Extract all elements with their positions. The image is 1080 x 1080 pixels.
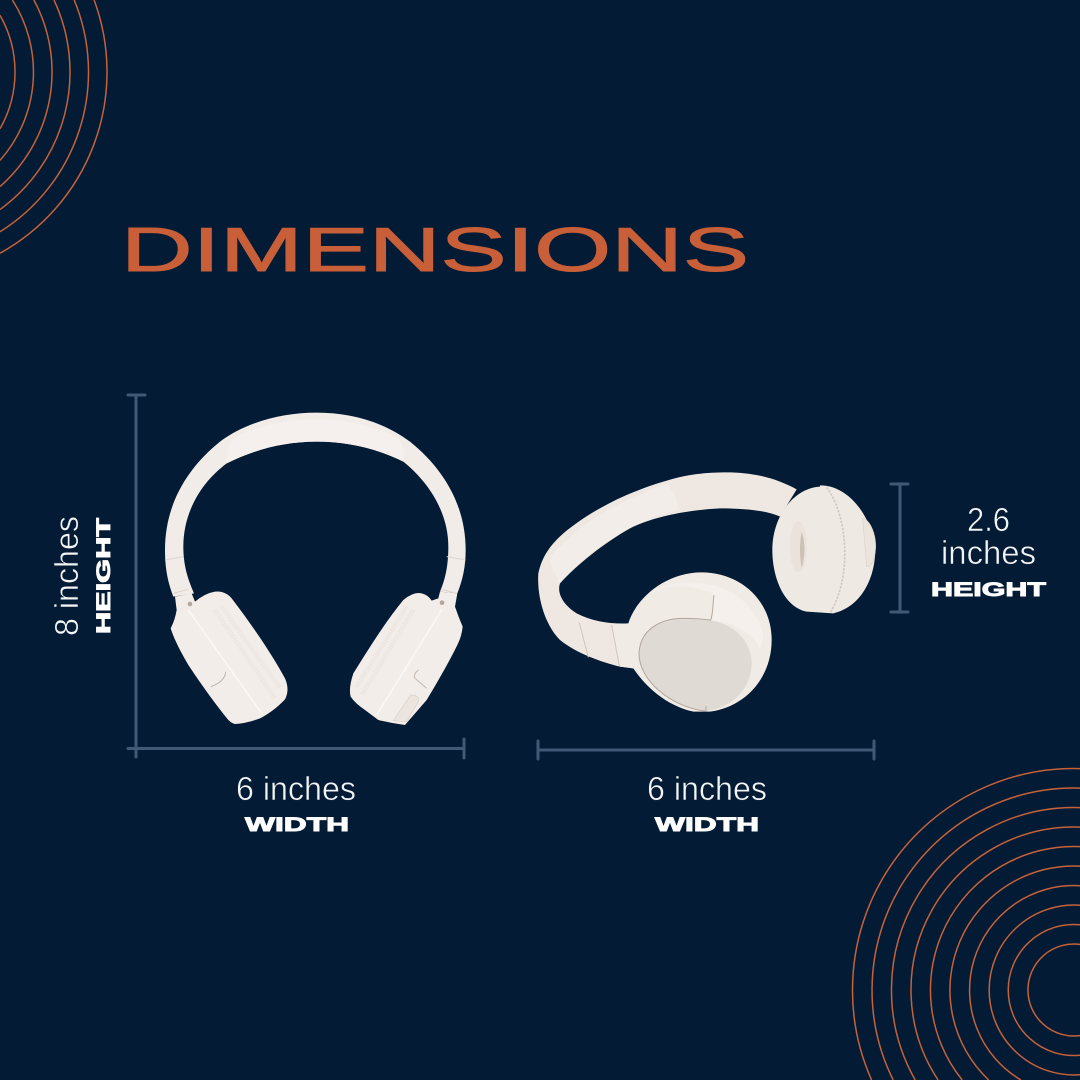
label: front height: 8 inches xyxy=(48,516,85,636)
label: front width: 6 inches xyxy=(236,770,356,807)
label: side height: inches xyxy=(941,534,1036,571)
label: side height: HEIGHT xyxy=(931,580,1047,601)
label: side width xyxy=(647,770,767,836)
label: side width: 6 inches xyxy=(647,770,767,807)
label: side height: 2.6 xyxy=(967,501,1010,538)
label: side width: WIDTH xyxy=(655,815,759,836)
headband xyxy=(538,472,797,668)
decorative concentric arcs: bottom right xyxy=(852,769,1080,1080)
right ear cup xyxy=(772,485,875,613)
right ear cup xyxy=(350,592,463,725)
front view dimension lines xyxy=(128,395,464,758)
left ear cup xyxy=(171,592,287,724)
side view dimension lines xyxy=(538,484,908,759)
label: side height xyxy=(931,501,1047,601)
left ear cup xyxy=(612,572,772,712)
icon: headphones front view xyxy=(165,413,466,725)
label: front height: HEIGHT xyxy=(94,517,115,634)
label: front height xyxy=(48,516,115,636)
label: front width: WIDTH xyxy=(245,815,349,836)
icon: headphones angled view xyxy=(538,472,876,712)
title: DIMENSIONS xyxy=(121,216,749,285)
decorative concentric arcs: top left xyxy=(0,0,107,253)
headband xyxy=(165,413,466,597)
label: front width xyxy=(236,770,356,836)
